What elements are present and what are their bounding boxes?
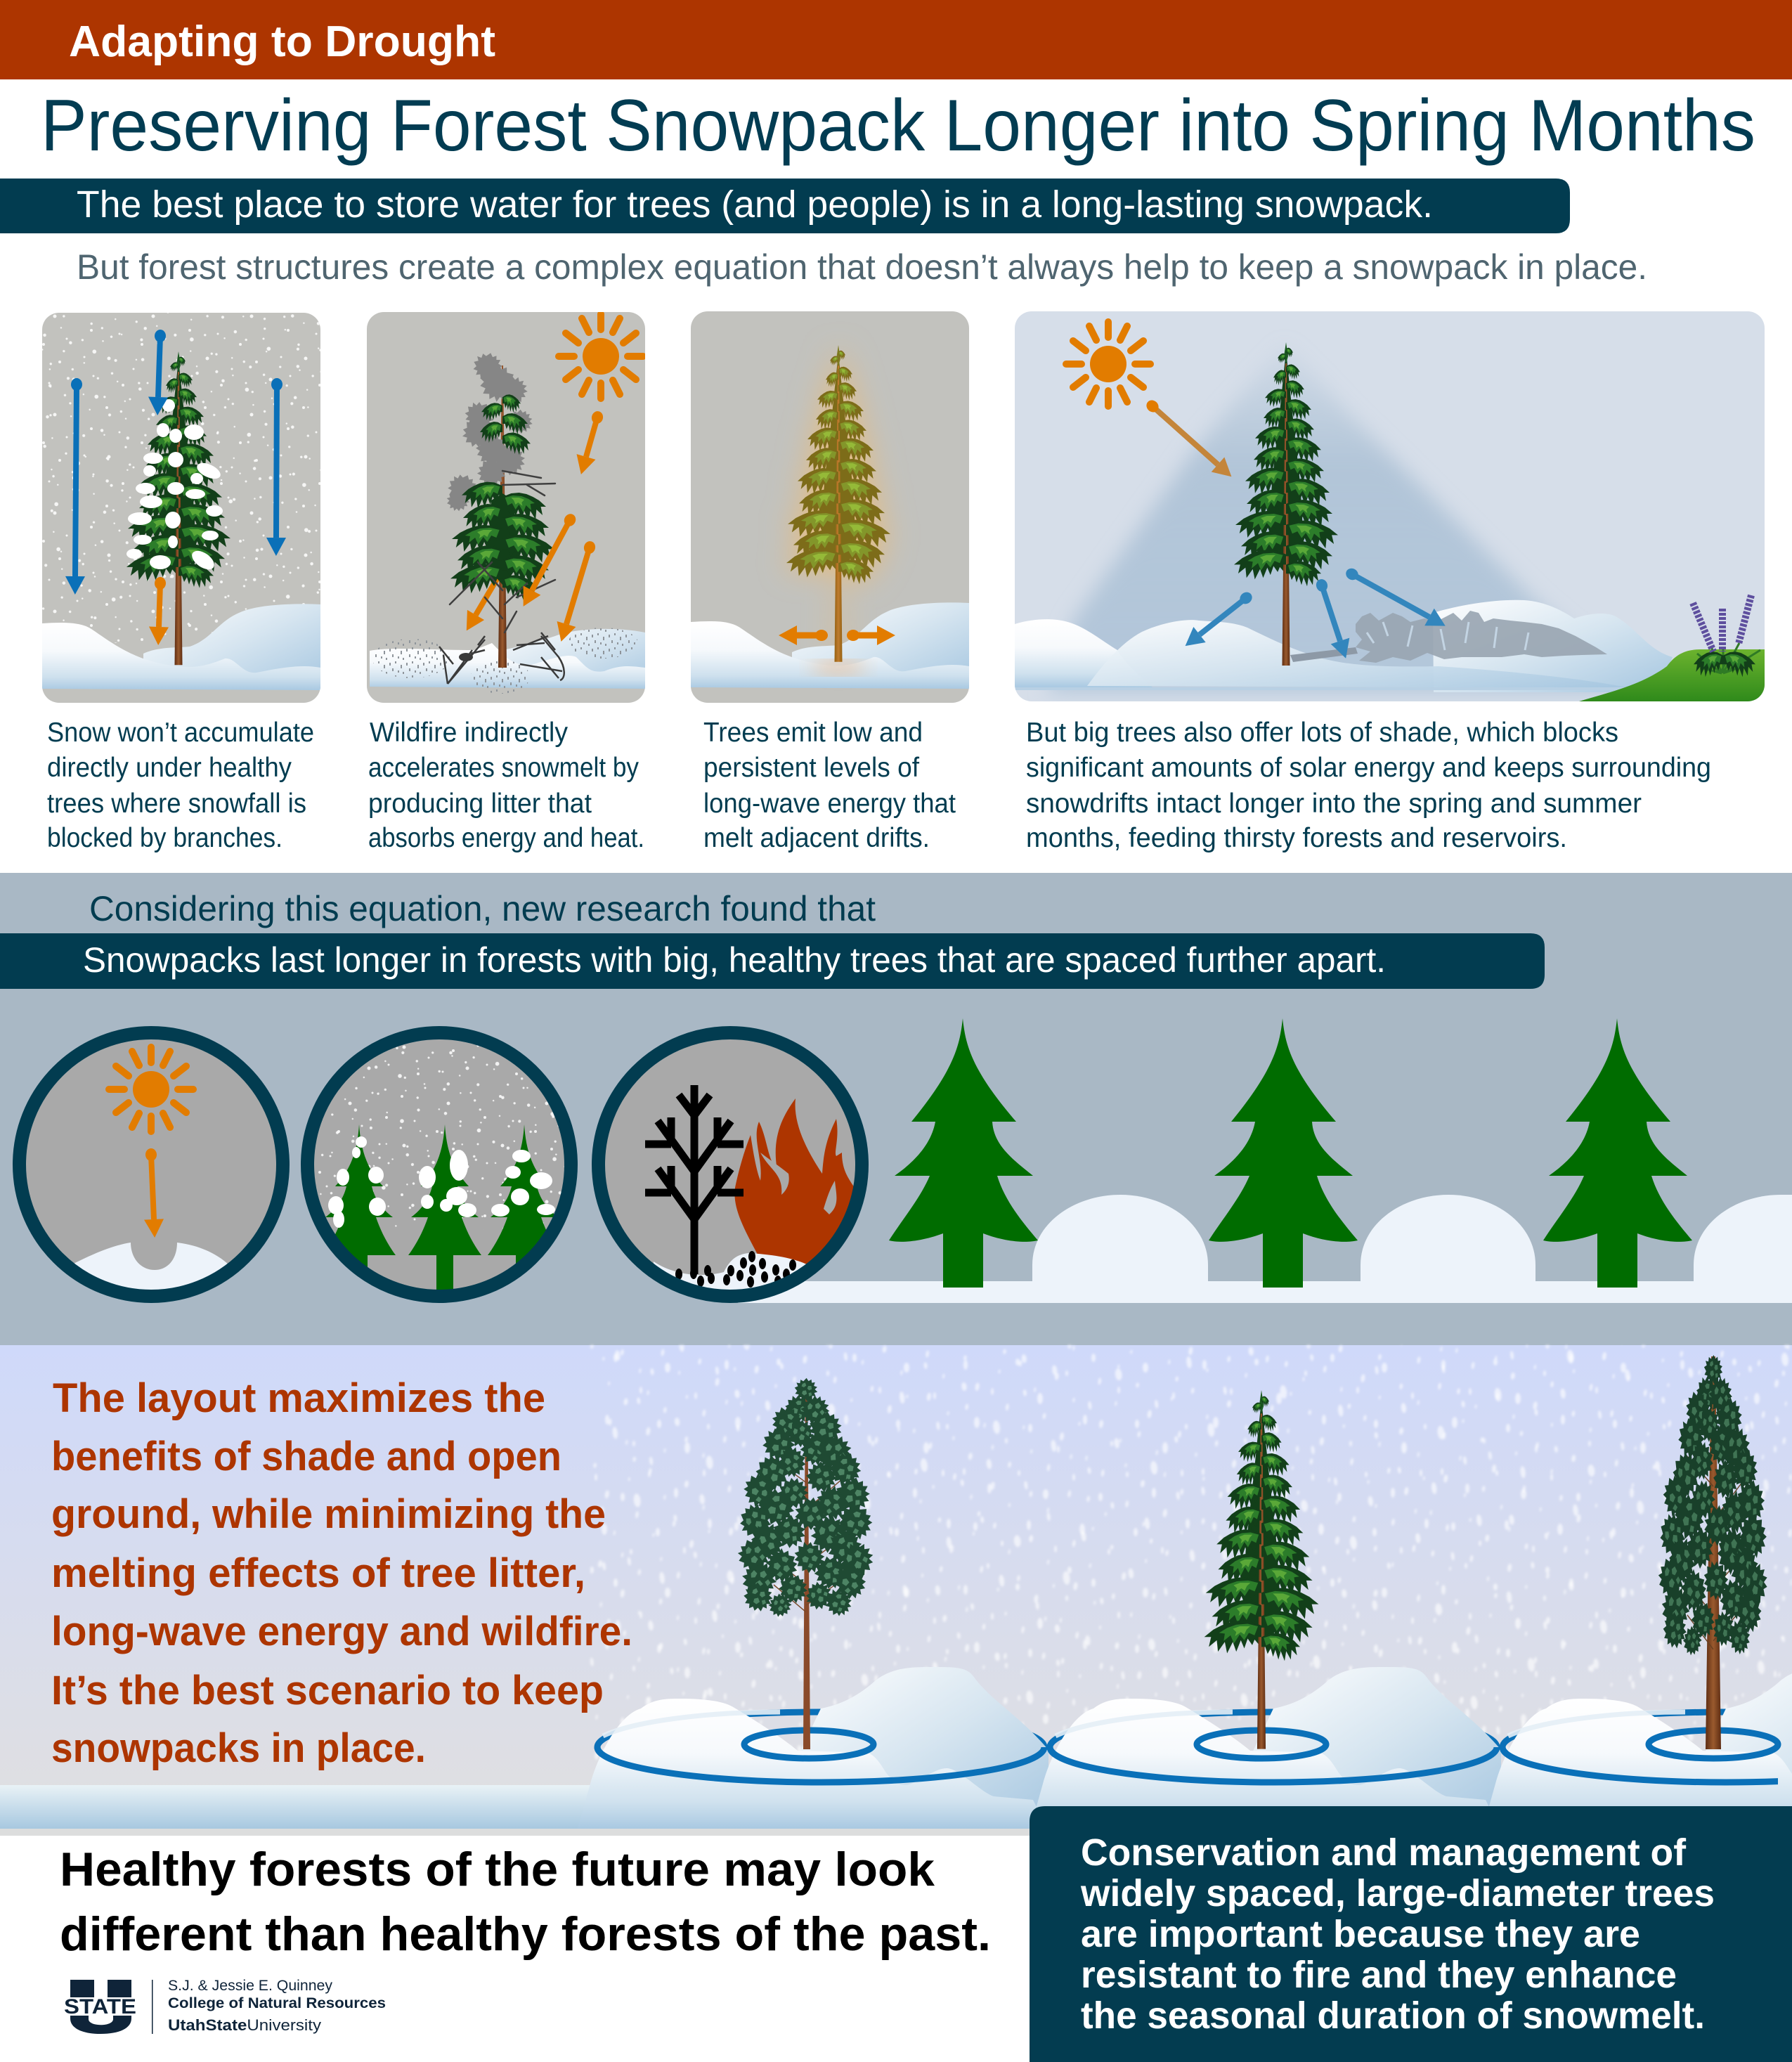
subheading: But forest structures create a complex equation that doesn’t always help to keep a snowpack in place. [77, 247, 1647, 287]
grass [1579, 649, 1765, 701]
panel: snowfall blocked by branches [42, 313, 320, 703]
takeaway text: The layout maximizes the [53, 1375, 545, 1421]
snow mounds [578, 1667, 1792, 1829]
shade cone [1047, 343, 1644, 692]
caption: shade: months, feeding thirsty forests and reservoirs. [1026, 823, 1567, 853]
finding band: Snowpacks last longer in forests with big, healthy trees that are spaced further apart. [83, 940, 1386, 980]
takeaway text: melting effects of tree litter, [51, 1550, 585, 1596]
caption: long-wave: melt adjacent drifts. [703, 823, 930, 853]
block U mark: STATE [64, 1995, 136, 2018]
icon: sun [559, 314, 643, 398]
logo: Utah State University: UtahState University [168, 2016, 321, 2034]
caption: snowfall: blocked by branches. [47, 823, 283, 853]
caption: wildfire: accelerates snowmelt by [368, 753, 639, 783]
top banner: Adapting to Drought [69, 18, 495, 66]
callout: conservation and management [1030, 1806, 1792, 2062]
top rim of rings [597, 1712, 1792, 1782]
caption: snowfall [47, 718, 314, 853]
arrows: solar energy and shade [1153, 406, 1429, 641]
arrow behind tree [467, 579, 499, 631]
callout: conservation and management: widely spaced, large-diameter trees [1080, 1872, 1715, 1914]
closing statement: Healthy forests of the future may look [60, 1843, 935, 1896]
caption: shade: But big trees also offer lots of shade, which blocks [1026, 718, 1618, 748]
tree [786, 345, 890, 662]
headline band: The best place to store water for trees (and people) is in a long-lasting snowpack. [77, 183, 1433, 226]
caption: snowfall: directly under healthy [47, 753, 292, 783]
fir tree 2 [1205, 1390, 1318, 1749]
section: snowy forest scene [0, 1345, 1792, 1836]
panel: long-wave energy [691, 311, 969, 703]
caption: long-wave: persistent levels of [703, 753, 919, 783]
top banner [0, 0, 1792, 79]
caption: wildfire [368, 718, 644, 853]
takeaway text: ground, while minimizing the [51, 1491, 606, 1537]
takeaway text: long-wave energy and wildfire. [51, 1609, 632, 1654]
caption: snowfall: trees where snowfall is [47, 789, 306, 819]
logo: Utah State University: S.J. & Jessie E. Quinney [168, 1978, 332, 1994]
finding band [0, 933, 1545, 989]
rings around trees: spacing [597, 1712, 1792, 1782]
callout: conservation and management: Conservation and management of [1081, 1831, 1687, 1874]
takeaway text [51, 1375, 632, 1771]
caption: long-wave [703, 718, 956, 853]
arrows: long-wave energy [797, 633, 877, 638]
takeaway text: snowpacks in place. [51, 1725, 426, 1771]
burnt tree [443, 349, 555, 668]
circle icon: tree, wildfire and litter [599, 1033, 862, 1307]
ground and drifts diagram [738, 1018, 1792, 1303]
circle icon: snowy trees [308, 1033, 571, 1296]
panel: shade from big trees [1015, 311, 1765, 701]
takeaway text: It’s the best scenario to keep [51, 1668, 604, 1713]
dead branches litter [439, 633, 564, 684]
caption: snowfall: Snow won’t accumulate [47, 718, 314, 748]
caption: shade: snowdrifts intact longer into the spring and summer [1026, 789, 1642, 819]
tree with snow [126, 351, 231, 665]
caption: wildfire: producing litter that [368, 789, 592, 819]
panel: wildfire litter [367, 312, 645, 703]
caption: long-wave: long-wave energy that [703, 789, 956, 819]
caption: shade: significant amounts of solar energy and keeps surrounding [1026, 753, 1711, 783]
headline band [0, 179, 1570, 233]
pine tree 3 [1655, 1353, 1773, 1749]
callout: conservation and management: the seasonal duration of snowmelt. [1081, 1995, 1705, 2037]
caption: long-wave: Trees emit low and [703, 718, 923, 748]
takeaway text: benefits of shade and open [51, 1434, 561, 1479]
closing statement [60, 1843, 991, 1961]
orange glow [784, 345, 893, 662]
section: research finding [0, 873, 1792, 1345]
lead-in text: Considering this equation, new research found that [89, 889, 876, 928]
arrows: energy onto litter [532, 417, 597, 624]
tree [1234, 342, 1338, 666]
icon: sun [1066, 322, 1150, 406]
circle icon: sun and melted snow [20, 1033, 283, 1307]
closing statement: different than healthy forests of the past. [60, 1907, 991, 1961]
caption: shade [1026, 718, 1711, 853]
snow with litter [370, 628, 645, 694]
callout: conservation and management: resistant to fire and they enhance [1081, 1954, 1677, 1996]
snow drifts [1015, 600, 1673, 692]
pine tree 1 [734, 1376, 880, 1749]
tree shadow [1290, 611, 1607, 663]
block U mark [64, 1980, 136, 2034]
caption: wildfire: Wildfire indirectly [370, 718, 568, 748]
lupine flowers [1693, 595, 1760, 677]
caption: wildfire: absorbs energy and heat. [368, 823, 644, 853]
logo: Utah State University [64, 1978, 386, 2034]
logo: Utah State University: College of Natural Resources [168, 1995, 386, 2011]
callout: conservation and management: are important because they are [1081, 1913, 1640, 1955]
arrows: snowfall and melt [75, 336, 277, 627]
